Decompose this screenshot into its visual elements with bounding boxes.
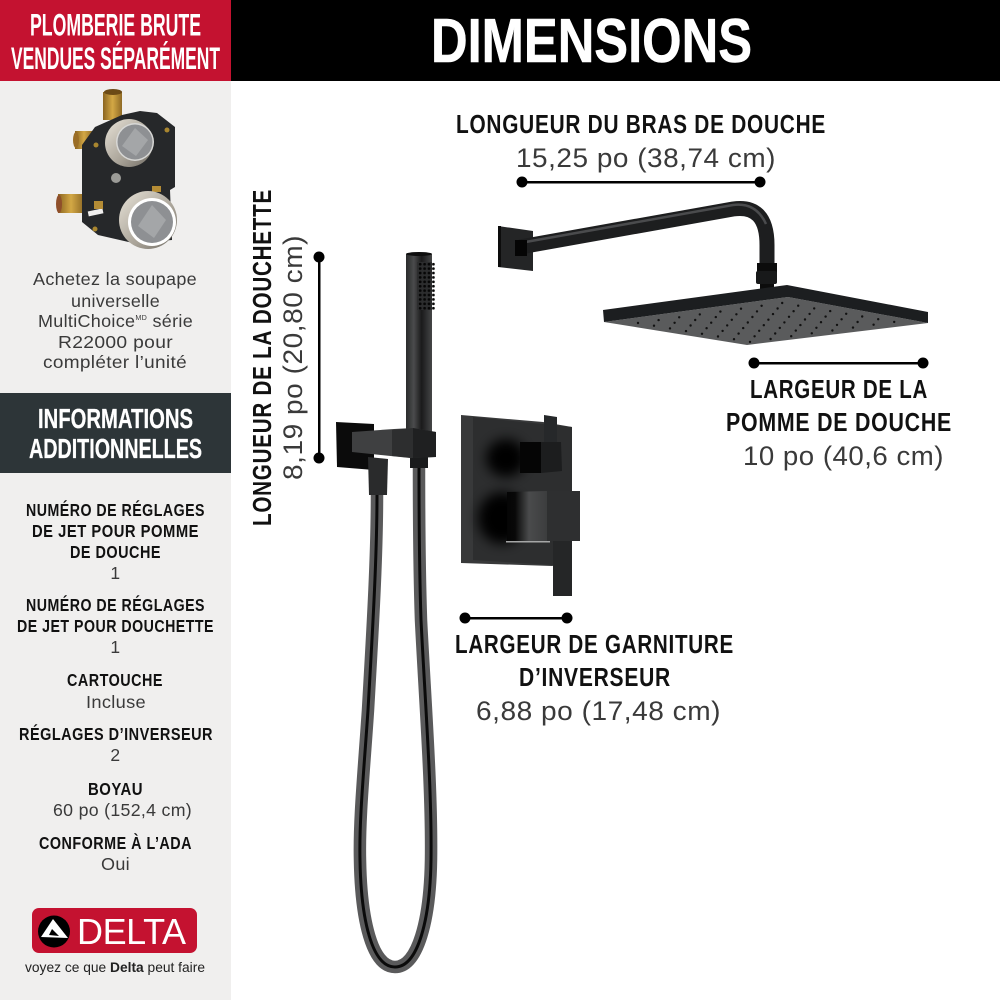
label: diverter trim width [455, 631, 734, 726]
label: hand shower length: 8,19 po (20,80 cm) [278, 235, 308, 480]
title: DIMENSIONS [431, 7, 752, 76]
logo: Delta: DELTA [77, 911, 186, 952]
text block: diverter settings: 2 [110, 745, 121, 765]
text block: cartridge: CARTOUCHE [67, 670, 163, 690]
text block: hose [53, 779, 192, 820]
label: diverter trim width: 6,88 po (17,48 cm) [476, 696, 721, 726]
icon: hand shower with hose [336, 252, 436, 967]
text block: spray settings for shower head [26, 500, 205, 583]
text block: spray settings for hand shower: DE JET POUR DOUCHETTE [17, 616, 214, 636]
header: black dimensions banner [231, 0, 1000, 81]
text block: hose: 60 po (152,4 cm) [53, 800, 192, 820]
text block: spray settings for hand shower: NUMÉRO DE RÉGLAGES [26, 595, 205, 615]
panel: additional information banner: ADDITIONNELLES [29, 433, 202, 464]
text block: buy the universal valve: série [147, 311, 193, 331]
text block: ADA compliance: CONFORME À L’ADA [39, 833, 192, 853]
panel: left sidebar background [0, 0, 231, 1000]
panel: red rough plumbing banner: VENDUES SÉPARÉMENT [11, 40, 220, 76]
text block: spray settings for shower head: 1 [110, 563, 121, 583]
panel: red rough plumbing banner: PLOMBERIE BRUTE [30, 6, 201, 42]
text block: ADA compliance: Oui [101, 854, 130, 874]
panel: additional information banner [0, 393, 231, 473]
sub-element: rain head body [603, 285, 928, 345]
label: head width: LARGEUR DE LA [750, 376, 928, 404]
arrow: trim width dimension line [460, 612, 572, 624]
arrow: shower arm dimension line [516, 176, 766, 188]
text block: buy the universal valve: R22000 pour [58, 332, 173, 352]
label: shower arm length: 15,25 po (38,74 cm) [516, 143, 776, 173]
text block: buy the universal valve: universelle [71, 291, 160, 311]
text block: buy the universal valve [33, 269, 197, 372]
text block: buy the universal valve: compléter l’unité [43, 352, 187, 372]
logo: Delta [25, 908, 205, 975]
label: head width: 10 po (40,6 cm) [743, 441, 944, 471]
text block: spray settings for hand shower [17, 595, 214, 657]
text block: diverter settings [19, 724, 213, 765]
label: diverter trim width: LARGEUR DE GARNITURE [455, 631, 734, 659]
label: head width [726, 376, 952, 471]
panel: additional information banner: INFORMATIONS [38, 403, 193, 434]
text block: hose: BOYAU [88, 779, 143, 799]
label: hand shower length [249, 189, 308, 526]
icon: shower arm and rain head [498, 205, 928, 345]
logo: Delta: voyez ce que Delta peut faire [25, 959, 205, 975]
text block: spray settings for hand shower: 1 [110, 637, 121, 657]
text block: ADA compliance [39, 833, 192, 874]
text block: cartridge [67, 670, 163, 712]
icon: diverter trim valve [461, 415, 580, 596]
sub-element: hose [360, 467, 431, 967]
text block: spray settings for shower head: DE JET POUR POMME [32, 521, 199, 541]
arrow: hand shower dimension line [314, 252, 324, 464]
panel: red rough plumbing banner [0, 0, 231, 81]
text block: buy the universal valve: MultiChoice [38, 311, 133, 331]
label: diverter trim width: D’INVERSEUR [519, 664, 671, 692]
text block: spray settings for shower head: DE DOUCHE [70, 542, 161, 562]
text block: cartridge: Incluse [86, 692, 146, 712]
label: head width: POMME DE DOUCHE [726, 409, 952, 437]
icon: rough-in valve [56, 89, 177, 249]
text block: buy the universal valve: Achetez la soupape [33, 269, 197, 289]
arrow: head width dimension line [748, 358, 928, 368]
text block: buy the universal valve: MD [135, 315, 147, 322]
label: shower arm length: LONGUEUR DU BRAS DE DOUCHE [456, 111, 826, 139]
label: shower arm length [456, 111, 826, 173]
label: hand shower length: LONGUEUR DE LA DOUCHETTE [249, 189, 277, 526]
text block: diverter settings: RÉGLAGES D’INVERSEUR [19, 724, 213, 744]
text block: spray settings for shower head: NUMÉRO DE RÉGLAGES [26, 500, 205, 520]
